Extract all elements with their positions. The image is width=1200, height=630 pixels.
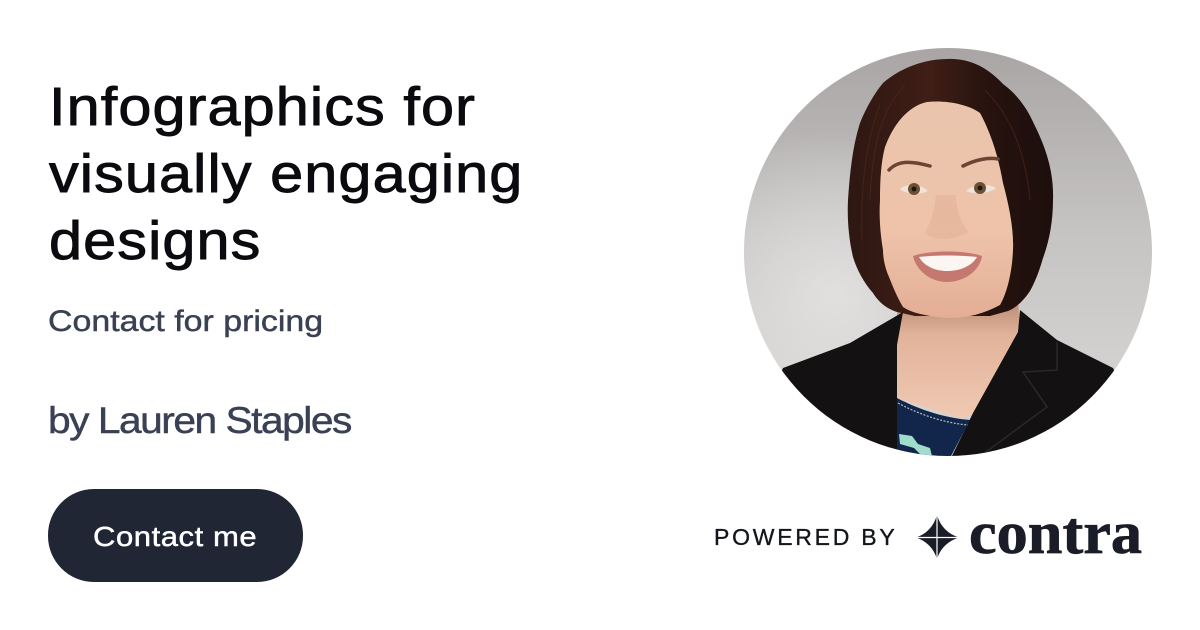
hair strands	[862, 85, 1030, 240]
contact button: Contact me	[93, 521, 258, 552]
title: designs	[49, 211, 261, 271]
powered by label: POWERED BY	[714, 524, 897, 550]
eyes	[900, 182, 996, 195]
jacket	[782, 310, 1114, 456]
subtitle: pricing: Contact for pricing	[48, 305, 323, 338]
hair	[848, 59, 1053, 316]
photo background	[744, 48, 1152, 456]
smile	[913, 252, 982, 282]
face	[880, 101, 1013, 318]
title	[48, 77, 523, 271]
jacket lapel	[984, 342, 1058, 453]
patterned blouse	[897, 398, 970, 458]
icon: contra star	[916, 515, 959, 559]
portrait photo	[744, 48, 1152, 456]
title: Infographics for	[49, 77, 476, 137]
author byline: by Lauren Staples	[48, 400, 351, 441]
title: visually engaging	[49, 144, 523, 204]
eyebrows	[889, 158, 998, 170]
neck	[897, 300, 1020, 418]
contact button	[48, 489, 303, 582]
contra logo	[918, 505, 1142, 565]
nose shadow	[925, 195, 969, 239]
